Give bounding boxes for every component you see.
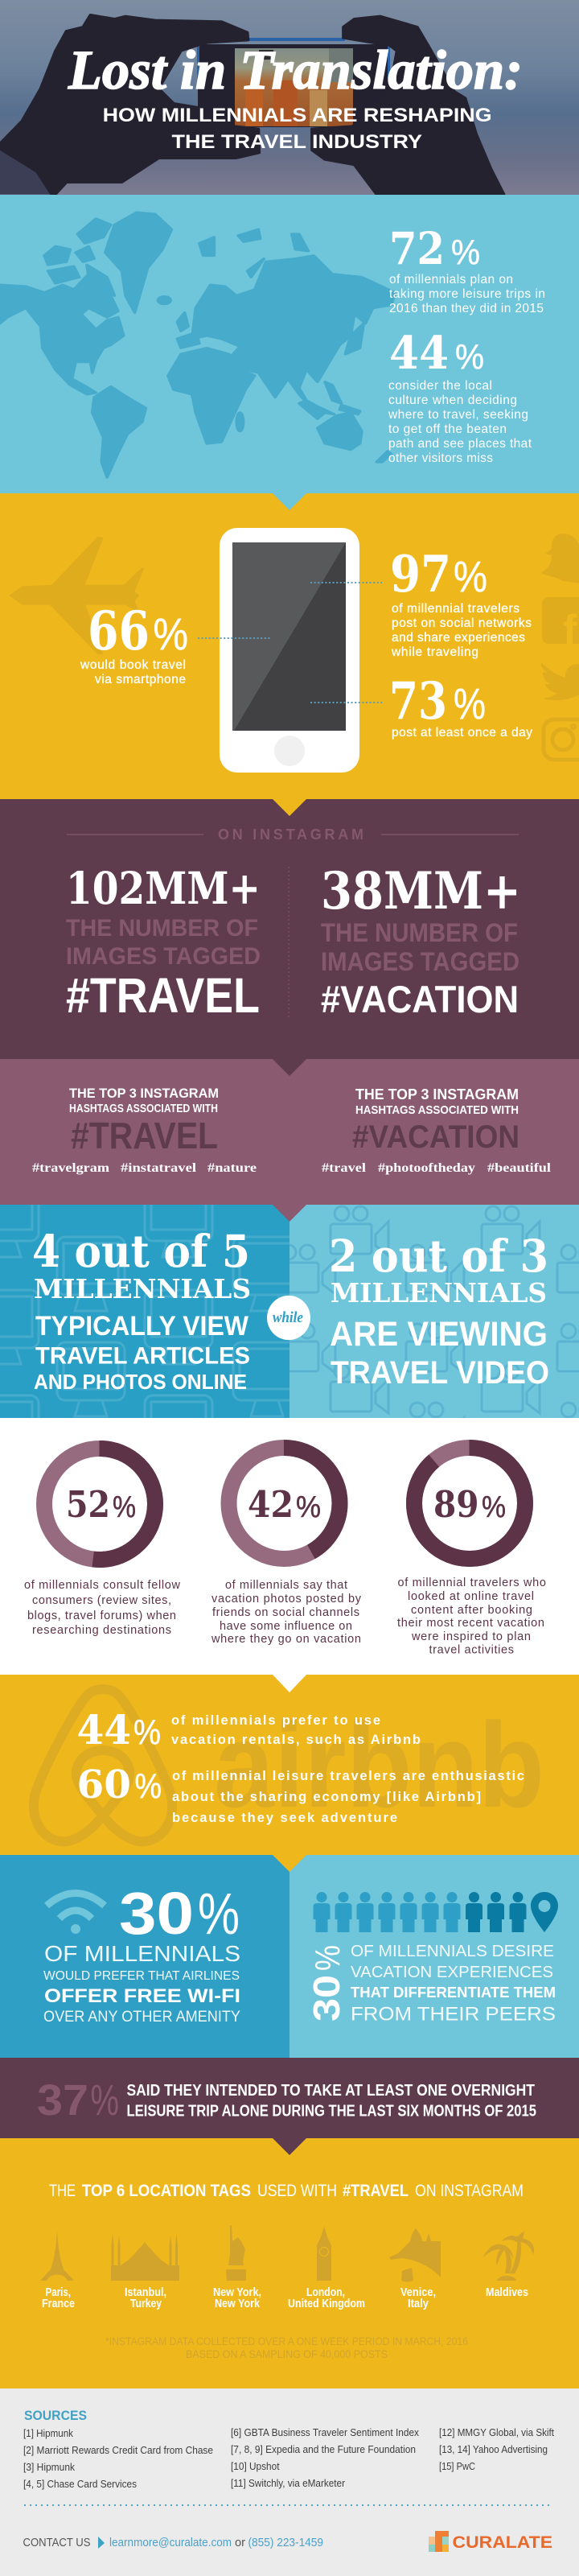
- stat: 37%: [37, 2076, 119, 2125]
- donut: 89%: 89: [433, 1483, 479, 1526]
- hashtags associated with #vacation: #photooftheday: [378, 1161, 475, 1175]
- location: Istanbul: Turkey: [130, 2298, 162, 2310]
- panel: free wi-fi: [0, 1855, 306, 2058]
- text: 2 out of 3: MILLENNIALS: [331, 1277, 547, 1309]
- stat: 44% vacation rentals: 44: [77, 1706, 131, 1754]
- panel: top location tags: [0, 2138, 579, 2388]
- header panel: [0, 0, 579, 195]
- stat: 30% experiences: THAT DIFFERENTIATE THEM: [351, 1985, 556, 2001]
- hashtags associated with #vacation: THE TOP 3 INSTAGRAM: [355, 1086, 519, 1103]
- stat: 44%: consider the local: [388, 379, 492, 393]
- dotted connectors: [198, 583, 382, 703]
- panel: viewing habits: [0, 1205, 579, 1418]
- donut: 42%: 42: [248, 1483, 294, 1526]
- photo: hands holding phone: [0, 14, 504, 195]
- location: New York: New York: [215, 2298, 261, 2310]
- stat: 30% wi-fi: [43, 1880, 240, 2026]
- stat: 44%: to get off the beaten: [388, 422, 507, 436]
- stat: 44%: 44: [389, 327, 449, 380]
- heading: sources: SOURCES: [24, 2408, 87, 2423]
- panel: sources footer: [0, 2388, 579, 2576]
- logo: Curalate: CURALATE: [452, 2533, 552, 2552]
- stat: 30% wi-fi: 30: [119, 1880, 194, 1947]
- stat: 97%: [390, 544, 532, 659]
- contact line: learnmore@curalate.com: [109, 2536, 232, 2549]
- stat: 73%: %: [454, 680, 486, 728]
- stat: #vacation count: #VACATION: [321, 978, 519, 1020]
- location: London: United Kingdom: [288, 2298, 365, 2310]
- stat: 66%: %: [153, 608, 188, 659]
- stat: 44%: path and see places that: [388, 437, 532, 451]
- stat: 44% vacation rentals: %: [133, 1713, 161, 1752]
- donut: 89%: %: [482, 1490, 506, 1524]
- stat: 97%: of millennial travelers: [392, 602, 519, 616]
- contact line: (855) 223-1459: [248, 2536, 323, 2549]
- donut: 42%: where they go on vacation: [211, 1633, 361, 1646]
- text: 4 out of 5: [32, 1225, 251, 1394]
- panel: on Instagram: [0, 799, 579, 1059]
- hashtags associated with #vacation: HASHTAGS ASSOCIATED WITH: [355, 1103, 519, 1117]
- icon: snapchat: [541, 534, 579, 583]
- text: 4 out of 5: 4 out of 5: [32, 1225, 250, 1277]
- badge: while: while: [273, 1309, 304, 1326]
- stat: 73%: [389, 671, 532, 740]
- icon: airbnb logo: airbnb: [214, 1697, 544, 1832]
- location: London: London,: [306, 2286, 345, 2299]
- stat: 44%: [388, 327, 532, 465]
- contact line: or: [235, 2536, 245, 2549]
- donut: 89%: content after booking: [411, 1604, 532, 1617]
- donut: 89%: of millennial travelers who: [397, 1577, 546, 1589]
- panel: smartphone statistics: [0, 493, 579, 799]
- icon: twitter: [541, 662, 579, 700]
- stat: 72%: 2016 than they did in 2015: [389, 302, 544, 315]
- heading: on Instagram: ON INSTAGRAM: [218, 826, 363, 843]
- panel: world map statistics: [0, 195, 579, 493]
- stat: 37%: 37: [37, 2076, 88, 2125]
- icon: wi-fi: [47, 1893, 105, 1931]
- location: Maldives: [483, 2232, 534, 2299]
- location: Venice: Italy: [408, 2298, 429, 2310]
- donut: 52%: consumers (review sites,: [32, 1594, 171, 1607]
- stat: 60% sharing economy: [77, 1762, 524, 1825]
- sources column 1: [3] Hipmunk: [23, 2462, 76, 2473]
- icon: facebook: [542, 597, 579, 653]
- location: New York: New York,: [213, 2286, 261, 2299]
- sources column 2: [6] GBTA Business Traveler Sentiment Index: [231, 2427, 420, 2438]
- stat: 44%: other visitors miss: [388, 451, 493, 465]
- stat: 60% sharing economy: of millennial leisure travelers are enthusiastic: [172, 1769, 524, 1783]
- hashtags associated with #vacation: [322, 1086, 552, 1175]
- location: Paris: Paris,: [45, 2286, 71, 2299]
- stat: #travel count: 102MM+: [66, 862, 261, 914]
- donut: 52%: %: [113, 1490, 136, 1524]
- stat: #vacation count: IMAGES TAGGED: [321, 947, 519, 976]
- world map: [0, 212, 395, 477]
- sources column 3: [13, 14] Yahoo Advertising: [439, 2444, 548, 2455]
- hashtags associated with #travel: THE TOP 3 INSTAGRAM: [69, 1086, 219, 1101]
- sources column 1: [2] Marriott Rewards Credit Card from Chase: [23, 2445, 213, 2456]
- hashtags associated with #travel: #TRAVEL: [71, 1115, 218, 1156]
- hashtags associated with #vacation: #VACATION: [352, 1119, 519, 1155]
- heading: top 6 location tags: THE: [49, 2182, 76, 2200]
- text: 2 out of 3: TRAVEL VIDEO: [331, 1355, 549, 1391]
- donut: 42%: of millennials say that: [225, 1579, 347, 1592]
- footnote: [105, 2335, 468, 2360]
- text: 4 out of 5: TYPICALLY VIEW: [35, 1311, 249, 1342]
- location: London: [288, 2226, 365, 2310]
- icon: airplane: [9, 537, 144, 654]
- stat: 30% experiences: VACATION EXPERIENCES: [351, 1964, 553, 1981]
- donut: 42%: vacation photos posted by: [211, 1593, 362, 1605]
- heading: top 6 location tags: TOP 6 LOCATION TAGS: [82, 2182, 251, 2200]
- icon: airbnb logo: [34, 1689, 544, 1841]
- location: Venice: Venice,: [400, 2286, 436, 2299]
- hashtags associated with #travel: HASHTAGS ASSOCIATED WITH: [69, 1103, 218, 1115]
- location: Istanbul: [111, 2233, 179, 2310]
- stat: 30% wi-fi: OFFER FREE WI-FI: [44, 1985, 240, 2007]
- location: Paris: France: [42, 2298, 75, 2310]
- donut: 52%: of millennials consult fellow: [24, 1579, 181, 1592]
- stat: 30% experiences: 30: [306, 1975, 347, 2022]
- stat: 60% sharing economy: about the sharing economy [like Airbnb]: [172, 1790, 481, 1804]
- donut: 52%: researching destinations: [32, 1624, 171, 1637]
- stat: 97%: and share experiences: [392, 631, 525, 645]
- stat: 44% vacation rentals: vacation rentals, such as Airbnb: [171, 1733, 421, 1747]
- stat: 66%: 66: [88, 600, 150, 662]
- stat: 72%: taking more leisure trips in: [389, 287, 545, 301]
- sources column 3: [12] MMGY Global, via Skift: [439, 2427, 554, 2438]
- donut: 89%: [397, 1448, 546, 1656]
- subtitle: THE TRAVEL INDUSTRY: [172, 131, 422, 153]
- sources column 1: [4, 5] Chase Card Services: [23, 2479, 137, 2490]
- stat: 66%: via smartphone: [95, 673, 186, 686]
- stat: 30% experiences: %: [308, 1945, 347, 1971]
- text: solo trip: [127, 2082, 536, 2120]
- text: 4 out of 5: MILLENNIALS: [34, 1273, 251, 1304]
- stat: 60% sharing economy: %: [135, 1766, 162, 1806]
- text: 2 out of 3: [329, 1230, 549, 1391]
- stat: #travel count: [66, 862, 261, 1023]
- location: Maldives: Maldives: [486, 2286, 528, 2299]
- footnote: *INSTAGRAM DATA COLLECTED OVER A ONE WEEK PERIOD IN MARCH, 2016: [105, 2335, 468, 2347]
- icon: map pin: [531, 1892, 558, 1932]
- stat: 60% sharing economy: because they seek adventure: [172, 1811, 397, 1825]
- sources column 1: [1] Hipmunk: [23, 2428, 74, 2439]
- stat: 72%: of millennials plan on: [389, 273, 513, 286]
- stat: 44% vacation rentals: of millennials prefer to use: [171, 1713, 380, 1728]
- stat: #travel count: THE NUMBER OF: [66, 915, 258, 942]
- stat: 30% wi-fi: WOULD PREFER THAT AIRLINES: [43, 1969, 240, 1983]
- stat: 97%: post on social networks: [392, 616, 532, 630]
- donut: 52%: 52: [66, 1483, 110, 1526]
- sources column 3: [439, 2427, 554, 2472]
- panel: donut charts: [0, 1418, 579, 1675]
- stat: 73%: 73: [389, 671, 447, 732]
- sources column 2: [231, 2427, 420, 2489]
- stat: 66%: [80, 600, 188, 686]
- hashtags associated with #vacation: #beautiful: [487, 1161, 552, 1175]
- social icons: [541, 534, 579, 760]
- stat: 30% wi-fi: %: [198, 1882, 240, 1947]
- donut: 42%: [211, 1448, 362, 1646]
- heading: top 6 location tags: ON INSTAGRAM: [415, 2182, 524, 2200]
- hashtags associated with #travel: [32, 1086, 257, 1175]
- hashtags associated with #travel: #nature: [207, 1161, 257, 1175]
- stat: #vacation count: 38MM+: [321, 861, 521, 921]
- stat: 72%: [389, 222, 545, 315]
- heading: top 6 location tags: USED WITH: [257, 2182, 337, 2200]
- donut: 89%: travel activities: [429, 1643, 514, 1656]
- stat: 72%: %: [451, 233, 480, 272]
- panel: solo travel: [0, 2058, 579, 2138]
- location: Paris: [40, 2231, 75, 2310]
- stat: 66%: would book travel: [80, 658, 186, 672]
- panel: vacation rentals: [0, 1675, 579, 1855]
- panel: differentiating experiences: [290, 1855, 579, 2058]
- hashtags associated with #travel: #travelgram: [32, 1161, 110, 1175]
- text: 4 out of 5: TRAVEL ARTICLES: [35, 1342, 250, 1370]
- stat: #travel count: #TRAVEL: [66, 968, 260, 1023]
- text: 2 out of 3: 2 out of 3: [329, 1230, 548, 1282]
- location: Istanbul: Istanbul,: [125, 2286, 166, 2299]
- sources column 2: [7, 8, 9] Expedia and the Future Foundation: [231, 2444, 416, 2455]
- sources column 2: [10] Upshot: [231, 2461, 280, 2472]
- donut: 89%: their most recent vacation: [397, 1617, 544, 1630]
- donut: 89%: were inspired to plan: [411, 1630, 531, 1643]
- people icons: [314, 1892, 526, 1932]
- stat: 97%: 97: [390, 544, 451, 604]
- stat: 44%: where to travel, seeking: [388, 408, 528, 422]
- stat: 30% experiences: FROM THEIR PEERS: [351, 2004, 556, 2025]
- location: Venice: [389, 2228, 441, 2310]
- stat: 60% sharing economy: 60: [77, 1762, 131, 1807]
- stat: 44% vacation rentals: [77, 1706, 421, 1754]
- icon: instagram: [544, 719, 579, 760]
- panel: top 3 hashtags: [0, 1059, 579, 1205]
- hashtags associated with #vacation: #travel: [322, 1161, 367, 1175]
- donut: 42%: have some influence on: [220, 1620, 352, 1633]
- heading: top 6 location tags: #TRAVEL: [343, 2182, 409, 2200]
- donut: 89%: looked at online travel: [408, 1590, 534, 1603]
- donut: 42%: friends on social channels: [212, 1606, 359, 1619]
- donut: 42%: %: [296, 1490, 321, 1524]
- stat: 30% wi-fi: OVER ANY OTHER AMENITY: [43, 2009, 240, 2026]
- stat: 37%: %: [90, 2076, 119, 2125]
- stat: 72%: 72: [389, 222, 445, 274]
- hashtags associated with #travel: #instatravel: [121, 1161, 197, 1175]
- stat: 44%: culture when deciding: [388, 394, 517, 407]
- donut: 52%: [24, 1449, 181, 1637]
- stat: #vacation count: [321, 861, 521, 1020]
- subtitle: HOW MILLENNIALS ARE RESHAPING: [103, 105, 492, 126]
- text: 2 out of 3: ARE VIEWING: [330, 1315, 548, 1354]
- stat: 97%: %: [454, 553, 487, 601]
- sources column 2: [11] Switchly, via eMarketer: [231, 2478, 345, 2489]
- icon: facebook: f: [563, 607, 577, 653]
- stat: #travel count: IMAGES TAGGED: [66, 943, 261, 970]
- text: 4 out of 5: AND PHOTOS ONLINE: [34, 1370, 247, 1394]
- stat: 30% experiences: OF MILLENNIALS DESIRE: [351, 1943, 554, 1960]
- donut: 52%: blogs, travel forums) when: [27, 1609, 176, 1622]
- stat: 30% experiences: [306, 1943, 556, 2025]
- stat: 30% wi-fi: OF MILLENNIALS: [44, 1941, 240, 1966]
- footnote: BASED ON A SAMPLING OF 40,000 POSTS: [186, 2348, 388, 2360]
- location: New York: [213, 2225, 261, 2310]
- title: Lost in Translation:: [68, 39, 523, 101]
- badge: while: [267, 1296, 310, 1340]
- stat: #vacation count: THE NUMBER OF: [321, 918, 518, 947]
- logo: Curalate: [429, 2531, 552, 2552]
- heading: top 6 location tags: [49, 2182, 524, 2200]
- contact line: [23, 2536, 323, 2549]
- icon: smartphone: [220, 528, 359, 773]
- stat: 97%: while traveling: [391, 645, 478, 659]
- stat: 44%: %: [455, 337, 484, 377]
- contact line: CONTACT US: [23, 2536, 90, 2549]
- sources column 1: [23, 2428, 213, 2490]
- subtitle: [103, 105, 492, 153]
- sources column 3: [15] PwC: [439, 2461, 475, 2472]
- stat: 73%: post at least once a day: [392, 726, 532, 740]
